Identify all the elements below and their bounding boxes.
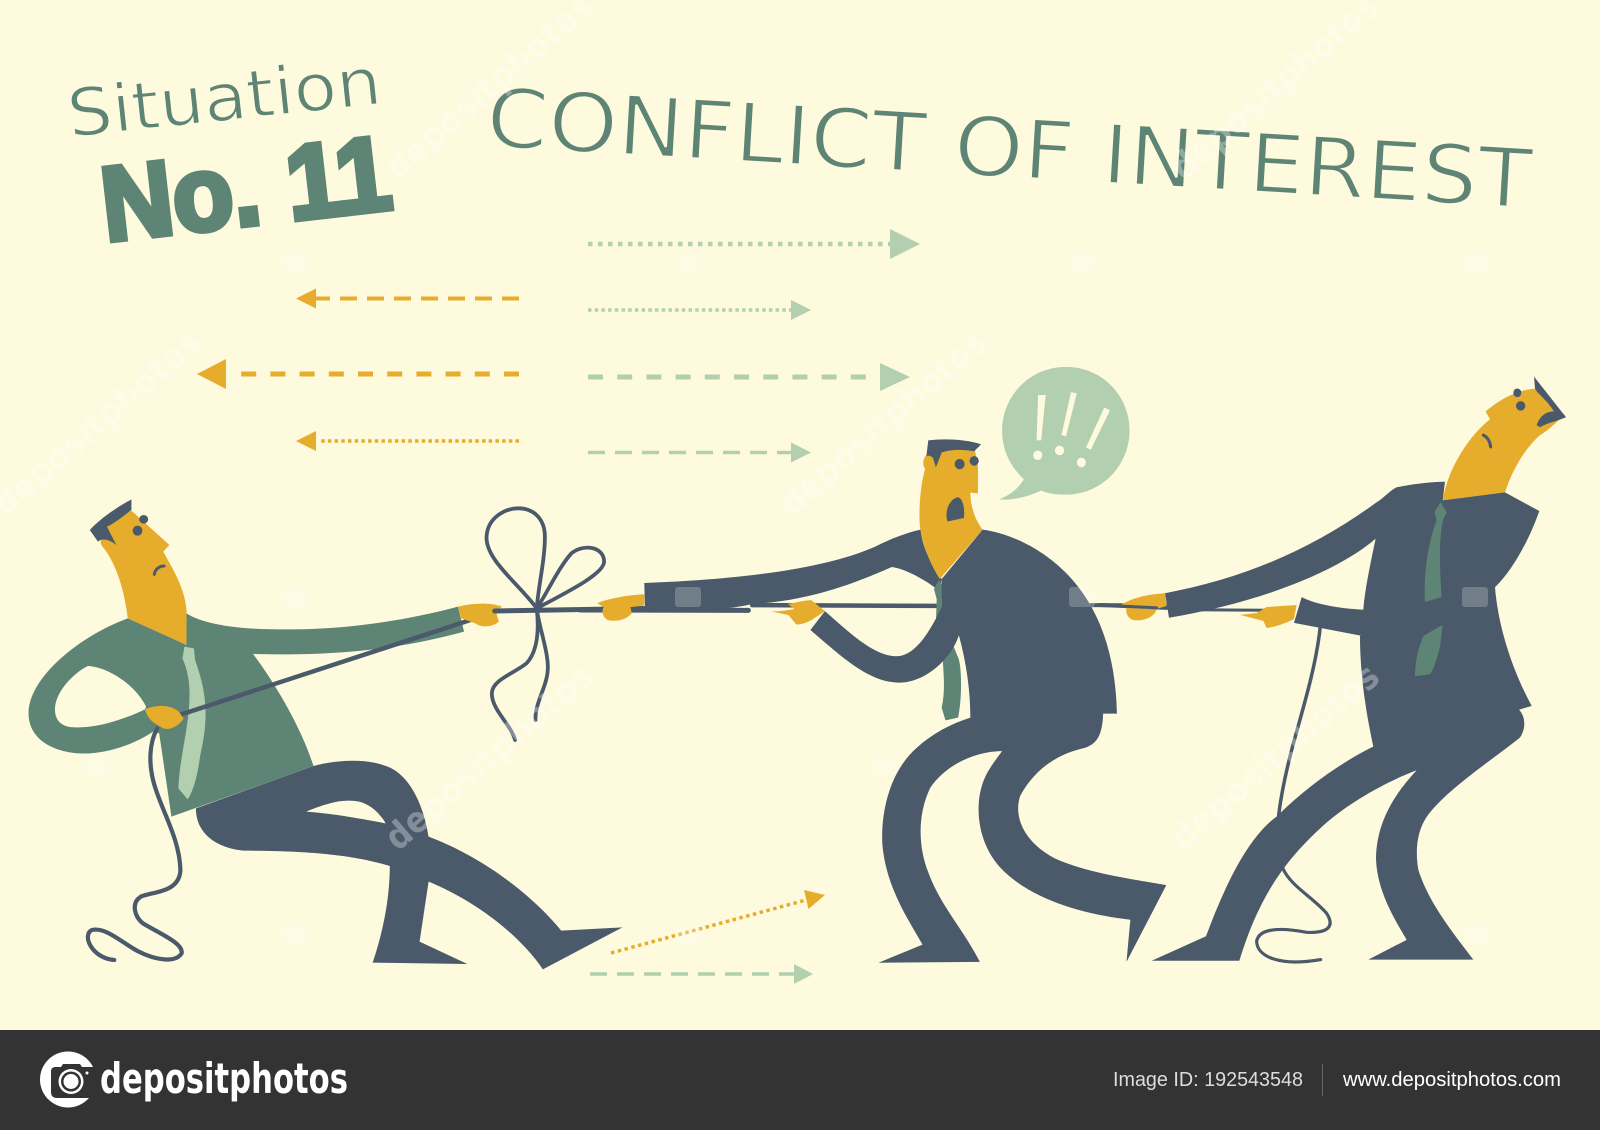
- speech bubble with exclamation marks: [999, 367, 1130, 500]
- eyes and mouth: [947, 456, 979, 522]
- footer image id: Image ID: 192543548: [1113, 1069, 1303, 1091]
- title: Conflict of Interest: CONFLICT OF INTEREST: [484, 71, 1536, 228]
- figure: right man in dark suit: [1100, 377, 1566, 962]
- figure: middle man in dark suit: [580, 439, 1166, 963]
- hand: near: [1240, 605, 1297, 628]
- loose rope lower: [1257, 868, 1330, 962]
- rope: [1100, 605, 1167, 608]
- hand: far: [1121, 593, 1167, 620]
- hair: [926, 439, 981, 467]
- rope: [180, 615, 486, 715]
- tie: [178, 647, 206, 799]
- arrow: green dashed long: [588, 363, 910, 391]
- tie lower: [942, 645, 961, 720]
- footer bar: [0, 1030, 1600, 1130]
- gap inside bent arm: [55, 666, 146, 727]
- eyes and mouth: [133, 515, 164, 574]
- loose rope: [88, 728, 182, 960]
- hand: rear: [145, 706, 184, 729]
- suit and legs: [879, 530, 1166, 963]
- hand: near: [771, 600, 825, 624]
- heading: Situation: Situation: [64, 43, 385, 153]
- jacket: [29, 607, 464, 817]
- arrow: green dotted long: [588, 229, 920, 259]
- head: [1443, 388, 1565, 500]
- bow: [487, 508, 604, 740]
- arrow: green dotted short: [588, 300, 811, 320]
- watermark text: depositphotos: [377, 656, 602, 859]
- suit and legs: [1152, 482, 1539, 961]
- arrow: yellow dashed short: [296, 288, 519, 308]
- arrow: green dashed short: [588, 442, 811, 462]
- gap between legs: [306, 801, 386, 823]
- watermark text: [0, 0, 1388, 859]
- watermark text: depositphotos: [771, 322, 996, 525]
- hair: [90, 499, 131, 545]
- hand: far: [597, 594, 644, 621]
- footer logo icon: camera: [40, 1052, 96, 1108]
- arrow: green dashed bottom: [590, 964, 813, 984]
- footer logo wordmark: depositphotos: [100, 1054, 348, 1103]
- tie: [1415, 502, 1447, 676]
- rope through front hands: [580, 607, 748, 613]
- rope to knot: [495, 608, 653, 611]
- rope over near hand: [1091, 603, 1166, 608]
- watermark text: depositphotos: [1163, 656, 1388, 859]
- tie: [934, 580, 945, 623]
- watermark camera icons: [84, 252, 1488, 944]
- near arm: [1294, 597, 1367, 635]
- head: [919, 446, 983, 579]
- footer url: www.depositphotos.com: [1342, 1069, 1561, 1091]
- figure: left man in green jacket: [29, 499, 653, 969]
- arrow: yellow dotted diagonal: [611, 890, 825, 953]
- rope over far hand: [1100, 605, 1157, 608]
- bent arm: [810, 591, 963, 683]
- arrow: yellow dotted: [296, 431, 519, 451]
- loose rope upper: [1278, 629, 1320, 818]
- eyes and mouth: [1483, 388, 1525, 447]
- rope: [752, 603, 936, 608]
- heading: No. 11: No. 11: [95, 115, 397, 264]
- hand: front: [458, 604, 502, 626]
- outstretched arm: [644, 530, 942, 612]
- head: [101, 511, 187, 645]
- legs: [196, 761, 622, 969]
- arrow: yellow dashed long: [197, 359, 519, 389]
- hair: [1534, 377, 1566, 427]
